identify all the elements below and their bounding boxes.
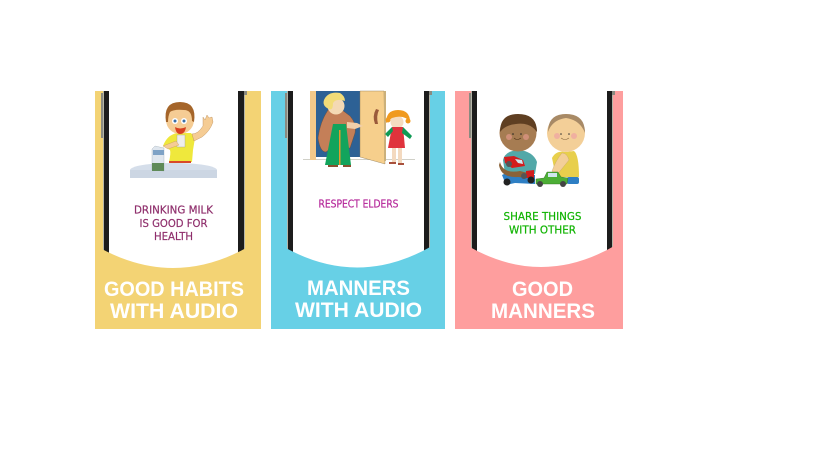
caption: drinking milk: IS GOOD FOR — [140, 217, 208, 230]
caption: drinking milk — [134, 204, 214, 243]
caption: share things — [504, 210, 582, 236]
title: good habits with audio — [104, 278, 244, 323]
illustration: boy drinking milk — [130, 102, 217, 178]
illustration: boys sharing toy cars — [499, 114, 585, 187]
panel: manners with audio — [271, 91, 445, 329]
title: good habits with audio: GOOD HABITS — [104, 278, 244, 301]
phone frame — [284, 91, 432, 280]
title: good habits with audio: WITH AUDIO — [110, 300, 238, 323]
caption: drinking milk: HEALTH — [154, 230, 193, 243]
title: manners with audio — [295, 277, 422, 322]
panel: good habits with audio — [95, 91, 261, 329]
title: good manners — [491, 278, 595, 323]
title: good manners: MANNERS — [491, 300, 595, 323]
caption: drinking milk: DRINKING MILK — [134, 204, 214, 216]
title: manners with audio: MANNERS — [307, 277, 410, 300]
phone frame — [100, 91, 248, 280]
caption: respect elders: RESPECT ELDERS — [318, 198, 399, 210]
illustration: elder and child at door — [303, 91, 415, 167]
caption: share things: WITH OTHER — [509, 224, 576, 236]
title: manners with audio: WITH AUDIO — [295, 299, 422, 322]
title: good manners: GOOD — [512, 278, 573, 301]
panel: good manners — [455, 91, 623, 329]
caption: share things: SHARE THINGS — [504, 210, 582, 223]
phone frame — [468, 91, 616, 280]
